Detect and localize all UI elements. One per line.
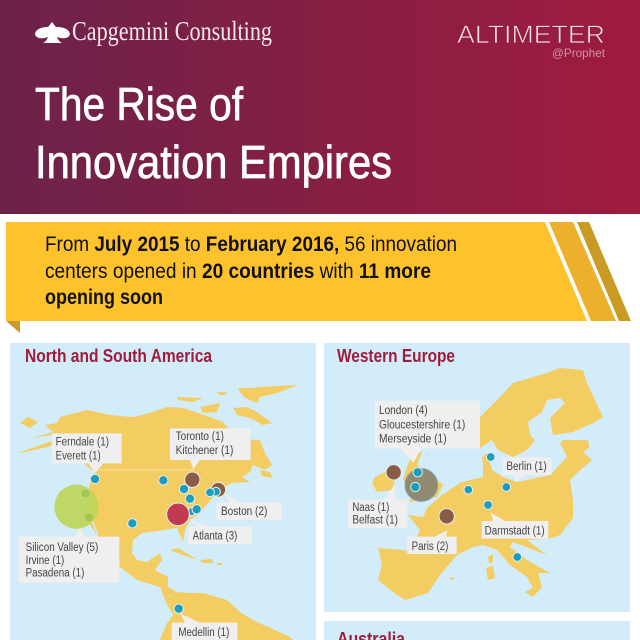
title: Innovation Empires	[35, 136, 392, 188]
label: Darmstadt: Darmstadt (1)	[485, 523, 545, 537]
label: Darmstadt	[482, 513, 548, 539]
label: Silicon Valley, Irvine, Pasadena: Pasadena (1)	[26, 566, 84, 580]
Capgemini Consulting logo: Capgemini Consulting	[72, 16, 272, 46]
label: Berlin	[503, 457, 552, 482]
label: Atlanta: Atlanta (3)	[193, 528, 237, 542]
label: Berlin: Berlin (1)	[506, 459, 547, 473]
label: Silicon Valley, Irvine, Pasadena: Silicon Valley (5)	[26, 540, 98, 554]
label: Naas, Belfast	[348, 487, 407, 528]
banner text: centers opened in 20 countries with 11 more	[45, 260, 431, 283]
label: Ferndale, Everett: Everett (1)	[56, 448, 101, 462]
heading: Western Europe: Western Europe	[337, 346, 455, 366]
map: Americas	[17, 385, 298, 640]
label: London, Gloucestershire, Merseyside: London (4)	[379, 403, 428, 417]
panel: Australia	[324, 621, 630, 640]
label: Paris: Paris (2)	[412, 539, 448, 553]
label: Medellin	[172, 613, 237, 640]
panel: North and South America	[10, 343, 316, 640]
label: Atlanta	[188, 520, 252, 544]
panel: Western Europe	[324, 343, 630, 612]
banner text: opening soon	[45, 286, 163, 309]
Altimeter logo	[457, 21, 606, 60]
label: Ferndale, Everett: Ferndale (1)	[56, 435, 109, 449]
banner text: From July 2015 to February 2016, 56 innovation	[45, 233, 457, 256]
label: Silicon Valley, Irvine, Pasadena	[18, 525, 119, 583]
Altimeter logo: ALTIMETER	[457, 21, 605, 49]
label: London, Gloucestershire, Merseyside: Gloucestershire (1)	[379, 417, 465, 431]
label: Paris	[407, 530, 457, 554]
label: Naas, Belfast: Naas (1)	[352, 500, 389, 514]
title: The Rise of	[35, 78, 243, 130]
title	[35, 78, 392, 188]
heading: North and South America: North and South America	[25, 346, 213, 366]
icon: spade	[35, 22, 70, 43]
label: Toronto, Kitchener	[170, 428, 251, 469]
label: London, Gloucestershire, Merseyside	[375, 401, 480, 463]
Altimeter logo: @Prophet	[552, 46, 606, 60]
header band	[0, 0, 640, 214]
label: Medellin: Medellin (1)	[178, 625, 229, 639]
label: Naas, Belfast: Belfast (1)	[352, 512, 398, 526]
map: Europe	[372, 368, 603, 600]
label: Silicon Valley, Irvine, Pasadena: Irvine (1)	[26, 553, 64, 567]
label: Toronto, Kitchener: Kitchener (1)	[176, 443, 233, 457]
label: Boston	[217, 494, 282, 520]
label: Toronto, Kitchener: Toronto (1)	[176, 429, 224, 443]
label: Boston: Boston (2)	[221, 504, 267, 518]
label: Ferndale, Everett	[52, 433, 122, 473]
label: London, Gloucestershire, Merseyside: Merseyside (1)	[379, 431, 447, 445]
bubbles: Americas innovation centers	[54, 472, 226, 613]
callout banner	[6, 222, 631, 333]
banner text	[45, 233, 457, 309]
bubbles: Europe innovation centers	[386, 453, 522, 561]
